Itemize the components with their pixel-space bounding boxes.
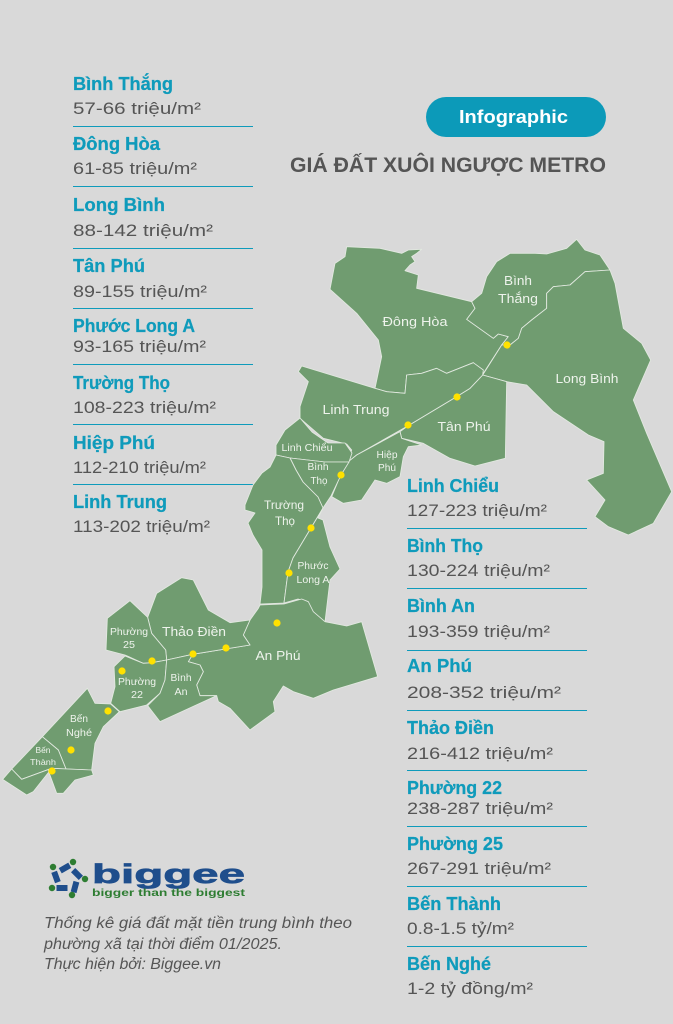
label: Bình An: An (174, 687, 188, 698)
label: Phường 25 (110, 627, 148, 651)
label: Bến Nghé: Bến (70, 713, 88, 725)
item: An Phú (407, 656, 587, 711)
label: Đông Hòa: Đông Hòa (382, 314, 448, 329)
label: Hiệp Phú: Hiệp (376, 450, 398, 461)
item: Bình Thọ: 130-224 triệu/m² (407, 561, 550, 580)
badge: Infographic (426, 97, 606, 137)
item: Linh Trung: Linh Trung (73, 492, 167, 512)
item: Hiệp Phú: 112-210 triệu/m² (73, 458, 206, 477)
label: Trường Thọ (264, 498, 304, 528)
item: Bình Thắng (73, 73, 253, 127)
item: Đông Hòa (73, 134, 253, 187)
item: Long Bình: 88-142 triệu/m² (73, 221, 213, 240)
item: An Phú: 208-352 triệu/m² (407, 683, 561, 702)
item: Thảo Điền: Thảo Điền (407, 718, 494, 738)
item: Trường Thọ: 108-223 triệu/m² (73, 398, 216, 417)
item: Đông Hòa: Đông Hòa (73, 134, 161, 154)
central wards (245, 418, 352, 622)
item: Long Bình (73, 195, 253, 249)
item: Phường 25: 267-291 triệu/m² (407, 859, 551, 878)
ward: Đông Hòa (330, 247, 508, 393)
item: Linh Chiểu: 127-223 triệu/m² (407, 501, 547, 520)
item: Bình Thọ: Bình Thọ (407, 536, 483, 556)
label: An Phú: An Phú (256, 648, 300, 663)
item: An Phú: An Phú (407, 656, 472, 676)
item: Bình Thắng: 57-66 triệu/m² (73, 99, 201, 118)
ward: Phường 22 (111, 656, 167, 712)
item: Bến Thành: Bến Thành (407, 894, 501, 914)
item: Tân Phú: Tân Phú (73, 256, 145, 276)
label: Phước Long A: Long A (296, 575, 330, 586)
item: Bình Thắng: Bình Thắng (73, 73, 173, 94)
label: Hiệp Phú (376, 450, 398, 474)
label: Phường 22: 22 (131, 689, 143, 701)
item: Phường 25 (407, 834, 587, 887)
label: Bình Thắng: Bình (504, 273, 532, 288)
label: Thảo Điền: Thảo Điền (162, 624, 226, 639)
item: Bến Thành: 0.8-1.5 tỷ/m² (407, 919, 514, 938)
label: Trường Thọ: Thọ (275, 514, 295, 528)
ward: Trường Thọ (245, 455, 323, 604)
label: Bình Thọ: Thọ (310, 476, 328, 487)
item: Linh Chiểu (407, 476, 587, 529)
item: Hiệp Phú: Hiệp Phú (73, 433, 155, 453)
ward: Tân Phú (400, 375, 507, 466)
southern wards (3, 578, 378, 795)
ward: Hiệp Phú (332, 432, 422, 503)
ward: Linh Chiểu (276, 418, 352, 462)
label: Bình Thắng: Thắng (498, 291, 538, 306)
ward: Phường 25 (106, 601, 167, 663)
label: Phường 25: 25 (123, 640, 135, 651)
item: Phường 25: Phường 25 (407, 834, 503, 854)
item: Tân Phú: 89-155 triệu/m² (73, 282, 207, 301)
ward: Bình An (148, 654, 217, 722)
ward: Linh Trung (298, 363, 483, 462)
ward: Bến Thành south-west (3, 768, 52, 795)
label: Bình An: Bình (170, 673, 192, 684)
label: Trường Thọ: Trường (264, 498, 304, 512)
footnote (43, 915, 352, 973)
item: Tân Phú (73, 256, 253, 309)
label: Phước Long A (296, 561, 330, 586)
item: Thảo Điền: 216-412 triệu/m² (407, 744, 553, 763)
item: Bến Nghé (407, 954, 533, 998)
label: Bình Thắng (498, 273, 538, 306)
label: Bến Nghé: Nghé (66, 727, 92, 739)
item: Bình Thọ (407, 536, 587, 589)
ward: Phước Long A (284, 508, 340, 622)
item: Linh Chiểu: Linh Chiểu (407, 476, 499, 496)
label: Phường 22 (118, 676, 156, 701)
ward: Long Bình (483, 270, 672, 535)
label: Long Bình: Long Bình (556, 371, 618, 386)
label: Bình An (170, 673, 192, 698)
label: Tân Phú: Tân Phú (438, 419, 490, 434)
footnote: Thực hiện bởi: Biggee.vn (44, 956, 221, 973)
item: Bến Thành (407, 894, 587, 947)
item: Phường 22: Phường 22 (407, 778, 502, 798)
label: Linh Chiểu: Linh Chiểu (282, 442, 332, 454)
footnote: Thống kê giá đất mặt tiền trung bình theo (44, 915, 352, 932)
label: Phước Long A: Phước (298, 561, 328, 572)
item: Trường Thọ: Trường Thọ (73, 373, 170, 393)
item: Long Bình: Long Bình (73, 195, 165, 215)
label: Hiệp Phú: Phú (378, 463, 396, 474)
item: Linh Trung (73, 492, 210, 536)
item: Bến Nghé: 1-2 tỷ đồng/m² (407, 979, 533, 998)
ward: Bình Thắng (467, 239, 610, 345)
title: GIÁ ĐẤT XUÔI NGƯỢC METRO (290, 153, 606, 177)
item: Bình An: Bình An (407, 596, 475, 616)
item: Bình An (407, 596, 587, 651)
ward: Bến Thành (12, 737, 66, 779)
item: Phường 22: 238-287 triệu/m² (407, 799, 553, 818)
ward: Bình Thọ (290, 458, 349, 508)
label: Linh Trung: Linh Trung (322, 402, 390, 417)
label: Bến Thành: Bến (36, 745, 51, 755)
item: Trường Thọ (73, 373, 253, 425)
item: Phước Long A (73, 316, 253, 365)
tagline: bigger than the biggest (92, 888, 246, 899)
wordmark: biggee (92, 859, 245, 889)
item: Linh Trung: 113-202 triệu/m² (73, 517, 210, 536)
ward: Bến Nghé (42, 688, 119, 770)
map of metro wards (3, 239, 672, 795)
label: Bình Thọ: Bình (308, 462, 328, 473)
label: Phường 25: Phường (110, 627, 148, 638)
item: Thảo Điền (407, 718, 587, 771)
label: Bến Nghé (66, 713, 92, 739)
price list: right column (407, 476, 587, 998)
item: Bến Nghé: Bến Nghé (407, 954, 491, 974)
ward: Bến Nghé south (48, 768, 93, 793)
ward name labels (30, 273, 618, 767)
item: Phước Long A: Phước Long A (73, 316, 195, 336)
item: Bình An: 193-359 triệu/m² (407, 622, 550, 641)
ward: An Phú (188, 599, 378, 730)
northern wards (298, 239, 672, 535)
item: Phường 22 (407, 778, 587, 827)
label: Bến Thành (30, 745, 56, 767)
icon: pentagon of links and dots (49, 859, 88, 898)
logo: biggee (49, 859, 246, 899)
footnote: phường xã tại thời điểm 01/2025. (43, 936, 282, 953)
ward: Thảo Điền (148, 578, 250, 660)
label: Phường 22: Phường (118, 676, 156, 688)
price list: left column (73, 73, 253, 536)
item: Đông Hòa: 61-85 triệu/m² (73, 159, 197, 178)
label: Bình Thọ (308, 462, 328, 487)
metro stations (48, 341, 511, 775)
badge: Infographic: Infographic (459, 107, 568, 127)
item: Hiệp Phú (73, 433, 253, 485)
item: Phước Long A: 93-165 triệu/m² (73, 337, 206, 356)
label: Bến Thành: Thành (30, 757, 56, 767)
